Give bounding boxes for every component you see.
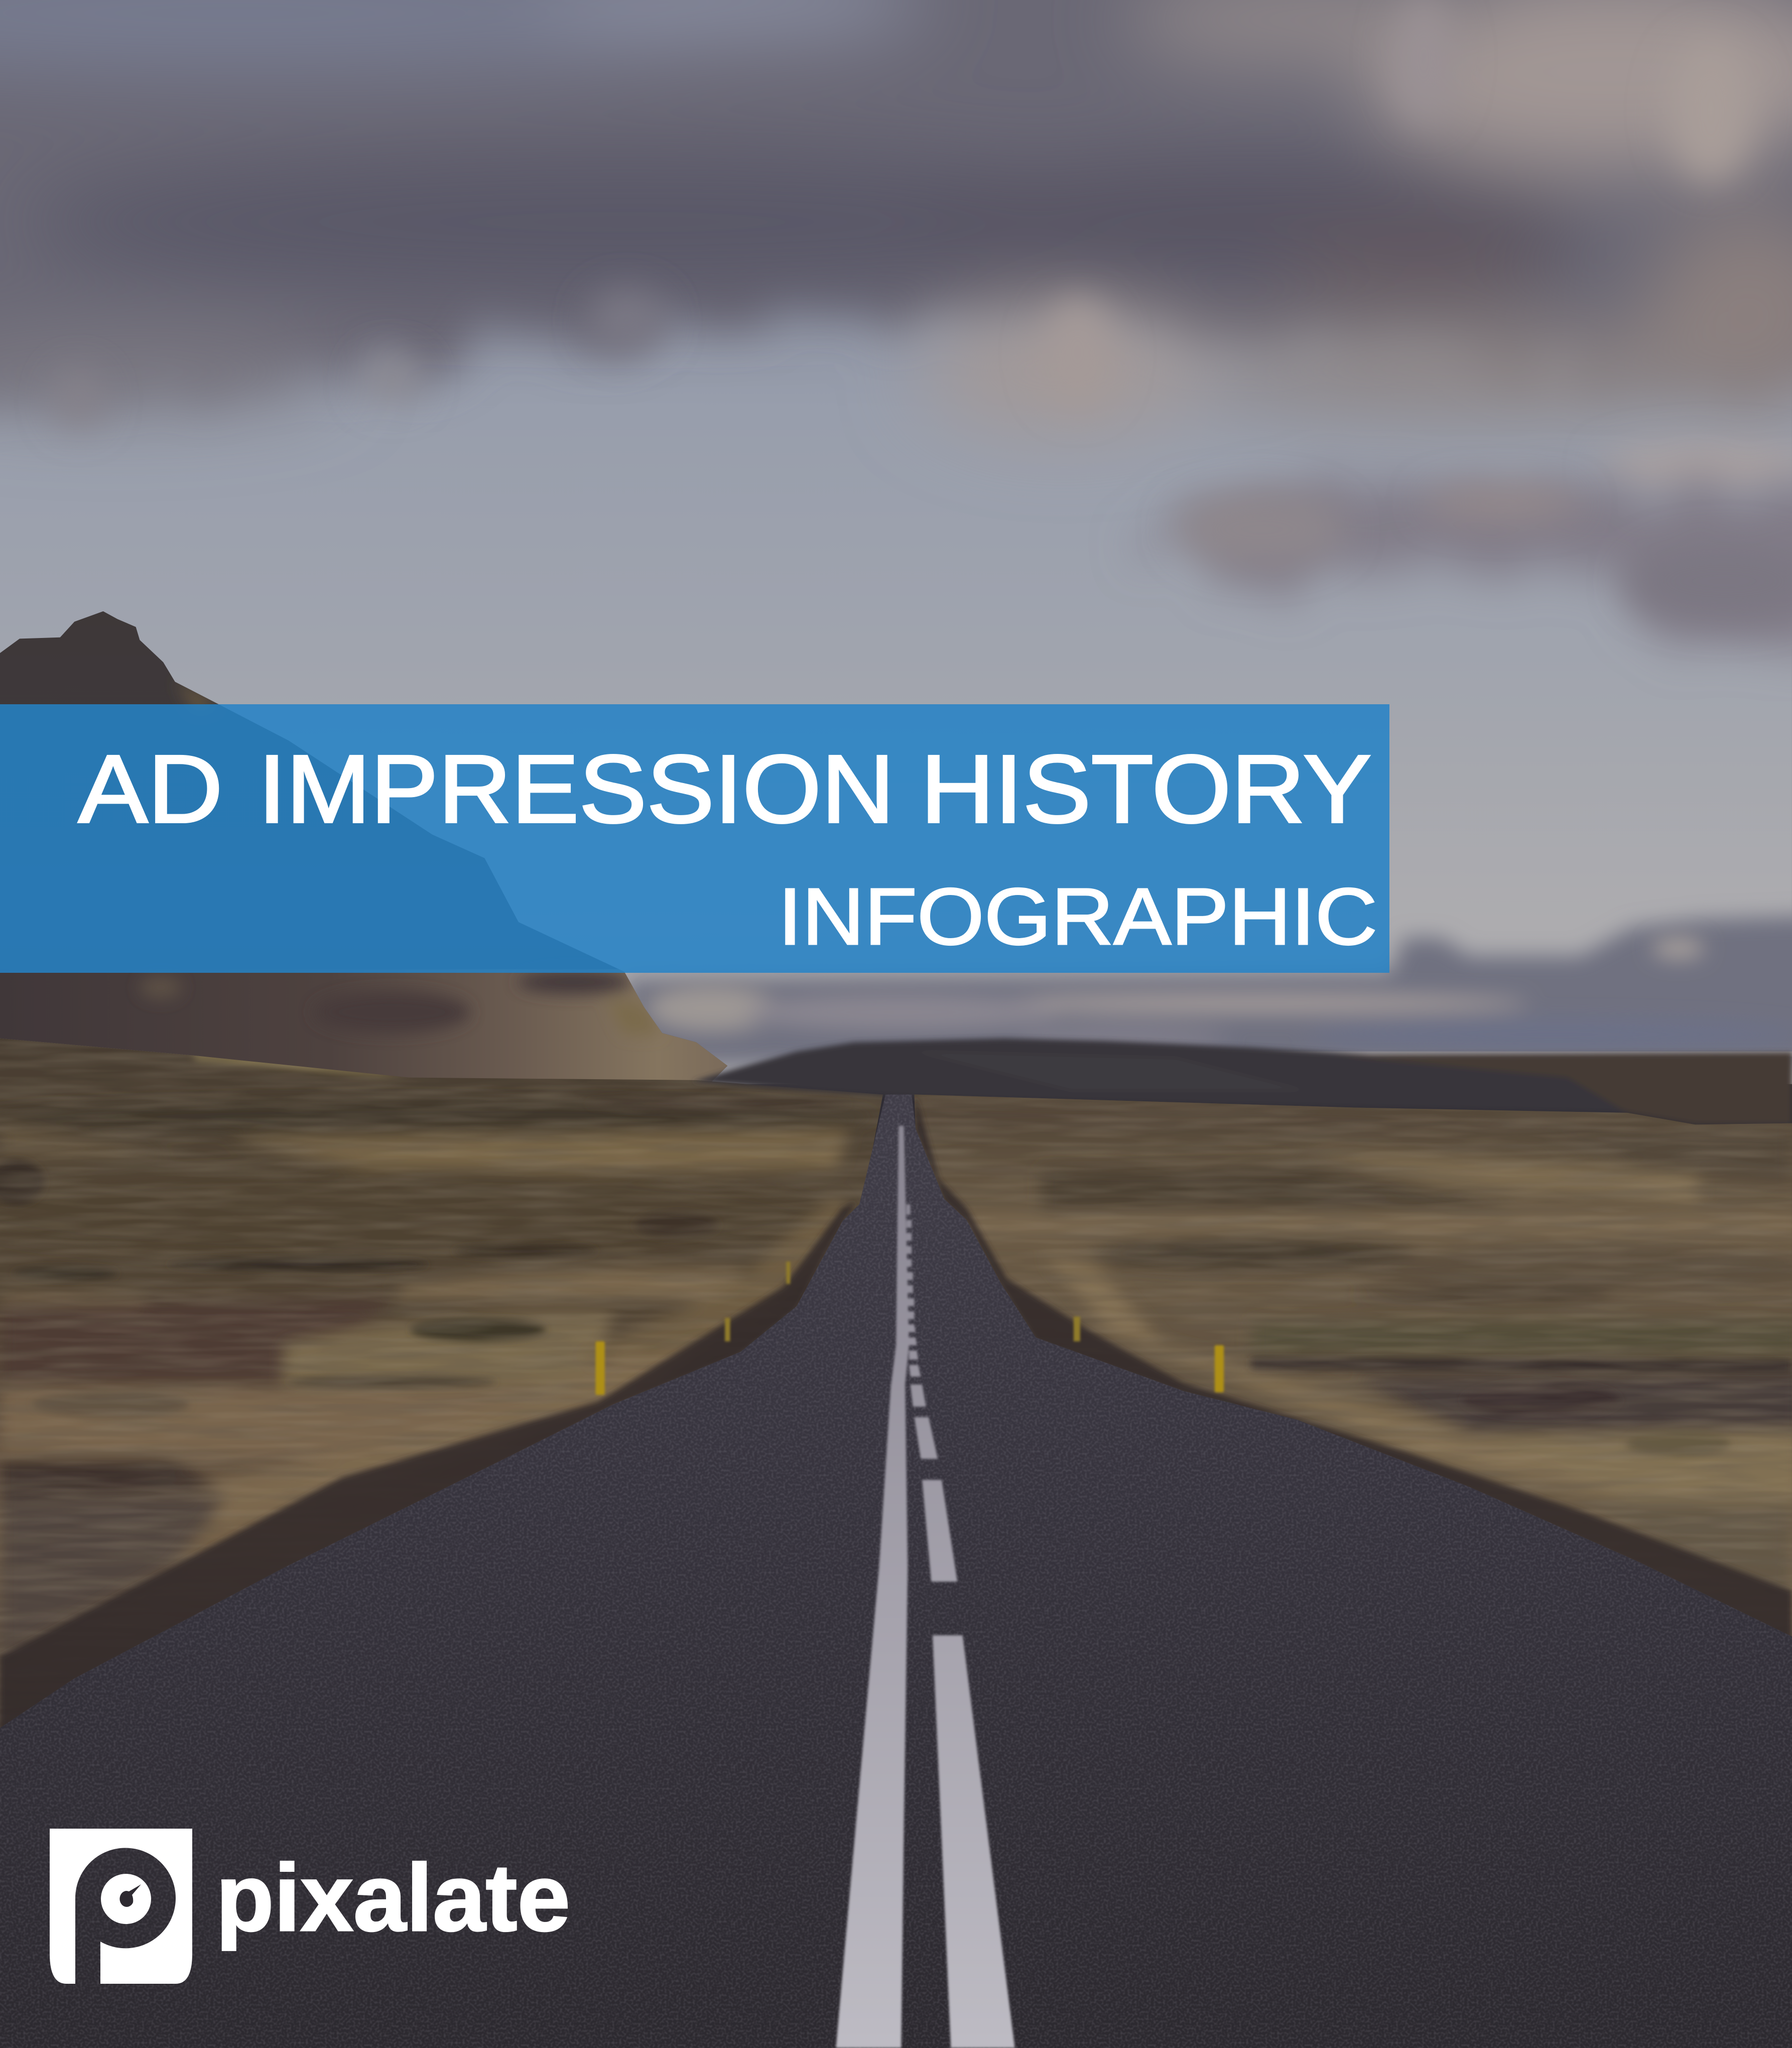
- far hills: [692, 1039, 1792, 1126]
- road centre lines: [836, 1126, 1015, 2048]
- left mountain: [0, 601, 744, 1093]
- gravel shoulder: right: [916, 1096, 1792, 1646]
- yellow roadside markers: [596, 1262, 1224, 1395]
- icon: P speedometer badge: [50, 1829, 192, 1984]
- left field: [0, 1032, 888, 1750]
- right mid cloud: [1149, 481, 1792, 651]
- gravel shoulder: left: [0, 1202, 855, 1737]
- wordmark: pixalate: pixalate: [216, 1845, 570, 1951]
- subtitle: INFOGRAPHIC: INFOGRAPHIC: [778, 871, 1377, 961]
- field colour patches: left: [0, 1100, 875, 1659]
- sky: [0, 0, 1792, 1084]
- road: [0, 1094, 1792, 2048]
- low horizon clouds: [627, 914, 1792, 1065]
- right field: [908, 1091, 1792, 1666]
- title: AD IMPRESSION HISTORY: AD: [78, 735, 223, 843]
- upper cloud bank: [0, 0, 1792, 399]
- field colour patches: right: [914, 1097, 1792, 1600]
- pixalate logo: [50, 1829, 570, 1984]
- title: AD IMPRESSION HISTORY: IMPRESSION: [258, 735, 894, 843]
- title banner: [0, 704, 1389, 973]
- title: AD IMPRESSION HISTORY: HISTORY: [921, 735, 1371, 843]
- solid centre line: [836, 1126, 909, 2048]
- cloud vertical wisps: [55, 0, 1792, 491]
- title: AD IMPRESSION HISTORY: [78, 735, 1371, 843]
- dashed centre line: [907, 1204, 1015, 2048]
